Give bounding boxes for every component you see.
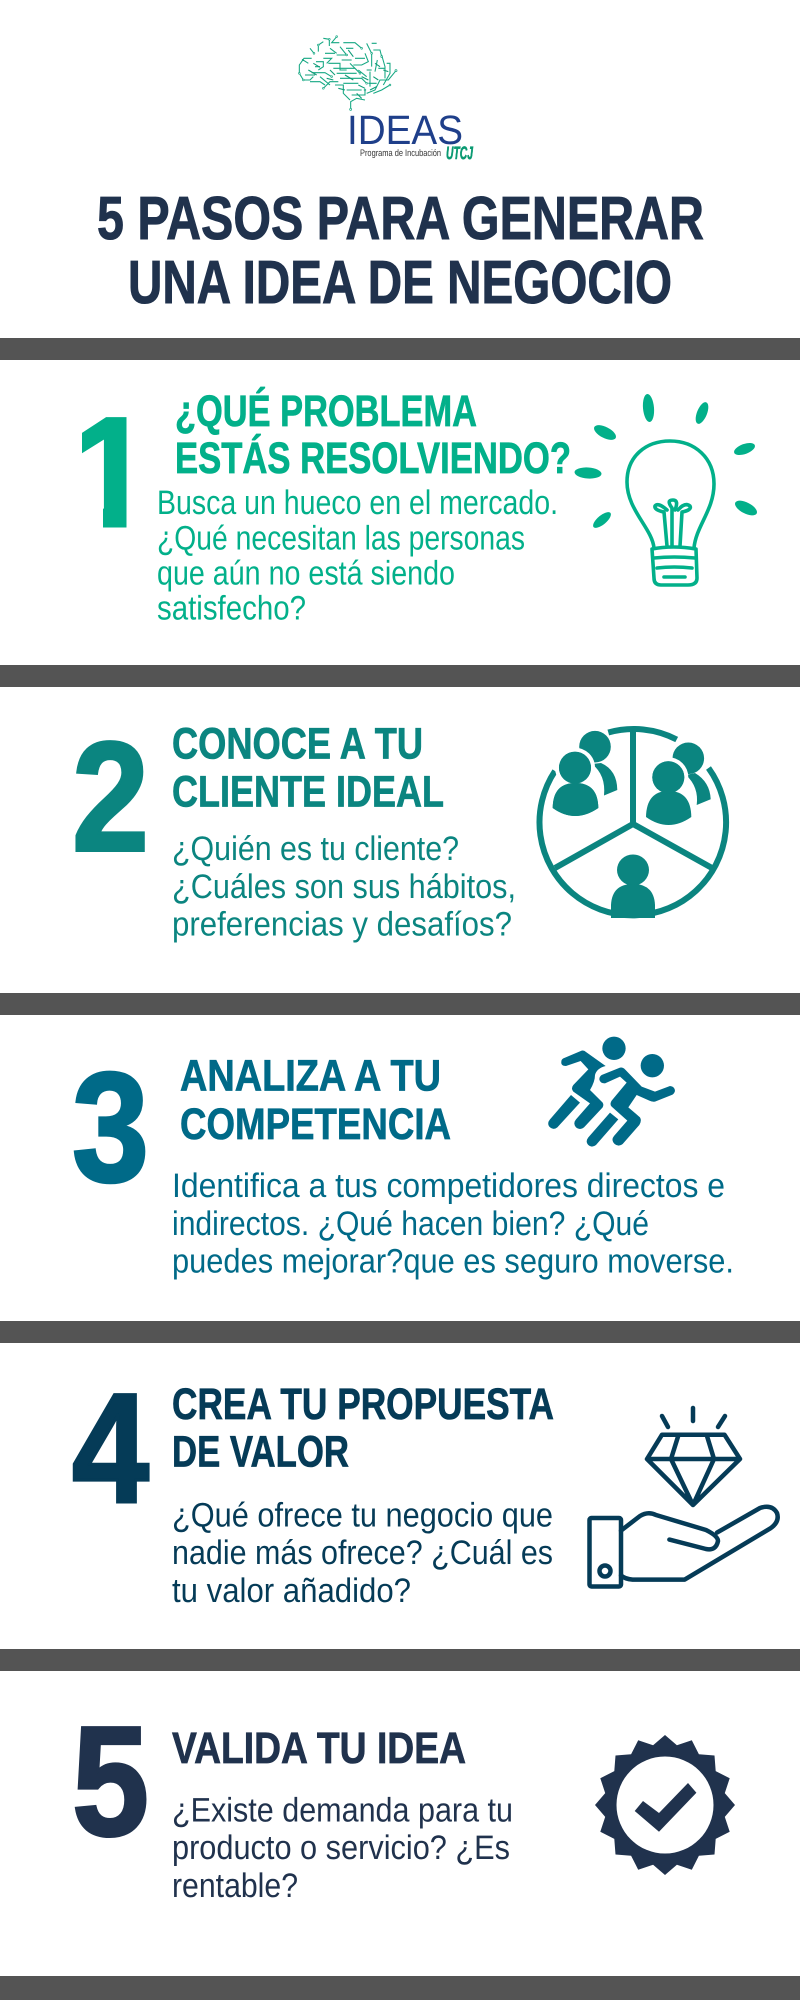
- title: [97, 184, 704, 316]
- icon: light bulb: [574, 394, 759, 585]
- heading step 4: DE VALOR: [172, 1428, 349, 1476]
- number 3: 3: [72, 1041, 149, 1215]
- text step 5: rentable?: [172, 1867, 298, 1905]
- panel: step 3: [72, 1037, 734, 1280]
- heading step 3: ANALIZA A TU: [180, 1052, 441, 1100]
- heading step 2: [172, 720, 444, 816]
- logo mark UTCJ: UTCJ: [446, 143, 474, 163]
- heading step 1: ESTÁS RESOLVIENDO?: [175, 434, 571, 483]
- text step 2: preferencias y desafíos?: [172, 906, 512, 944]
- text step 1: Busca un hueco en el mercado.: [157, 484, 558, 522]
- text step 5: producto o servicio? ¿Es: [172, 1829, 510, 1867]
- number 5: 5: [72, 1695, 149, 1869]
- text step 1: ¿Qué necesitan las personas: [157, 520, 525, 558]
- text step 4: [172, 1496, 553, 1610]
- heading step 1: ¿QUÉ PROBLEMA: [175, 387, 477, 436]
- heading step 5: VALIDA TU IDEA: [172, 1724, 466, 1773]
- panel: step 5: [72, 1695, 735, 1905]
- logo wordmark: IDEAS: [347, 107, 463, 153]
- text step 3: puedes mejorar?que es seguro moverse.: [172, 1242, 734, 1280]
- text step 2: ¿Quién es tu cliente?: [172, 830, 459, 868]
- heading step 3: COMPETENCIA: [180, 1100, 451, 1149]
- icon: runners: [548, 1037, 675, 1147]
- text step 3: [172, 1167, 734, 1280]
- text step 4: tu valor añadido?: [172, 1572, 411, 1610]
- logo tagline: Programa de Incubación: [360, 148, 441, 159]
- number 4: 4: [72, 1362, 149, 1536]
- icon: hand holding diamond: [590, 1408, 778, 1586]
- heading step 1: [175, 387, 571, 483]
- text step 2: ¿Cuáles son sus hábitos,: [172, 868, 516, 906]
- heading step 2: CLIENTE IDEAL: [172, 768, 444, 816]
- text step 1: satisfecho?: [157, 590, 306, 628]
- panel: step 4: [72, 1362, 778, 1610]
- panel: step 1: [69, 386, 759, 628]
- text step 4: nadie más ofrece? ¿Cuál es: [172, 1534, 553, 1572]
- number 2: 2: [72, 710, 149, 884]
- text step 5: [172, 1792, 513, 1905]
- icon: customer segments pie: [539, 729, 726, 918]
- heading step 4: CREA TU PROPUESTA: [172, 1380, 554, 1429]
- heading step 2: CONOCE A TU: [172, 720, 423, 768]
- icon: circuit brain: [298, 36, 397, 110]
- text step 1: [157, 484, 558, 628]
- text step 2: [172, 830, 516, 944]
- text step 4: ¿Qué ofrece tu negocio que: [172, 1496, 553, 1534]
- icon: check badge: [595, 1735, 735, 1875]
- text step 5: ¿Existe demanda para tu: [172, 1792, 513, 1830]
- panel: step 2: [72, 710, 726, 944]
- heading step 3: [180, 1052, 451, 1149]
- text step 1: que aún no está siendo: [157, 554, 455, 592]
- text step 3: Identifica a tus competidores directos e: [172, 1167, 725, 1205]
- text step 3: indirectos. ¿Qué hacen bien? ¿Qué: [172, 1205, 649, 1243]
- number 1: 1: [69, 386, 156, 560]
- logo: IDEAS programa de incubación: [298, 36, 474, 163]
- heading step 4: [172, 1380, 554, 1476]
